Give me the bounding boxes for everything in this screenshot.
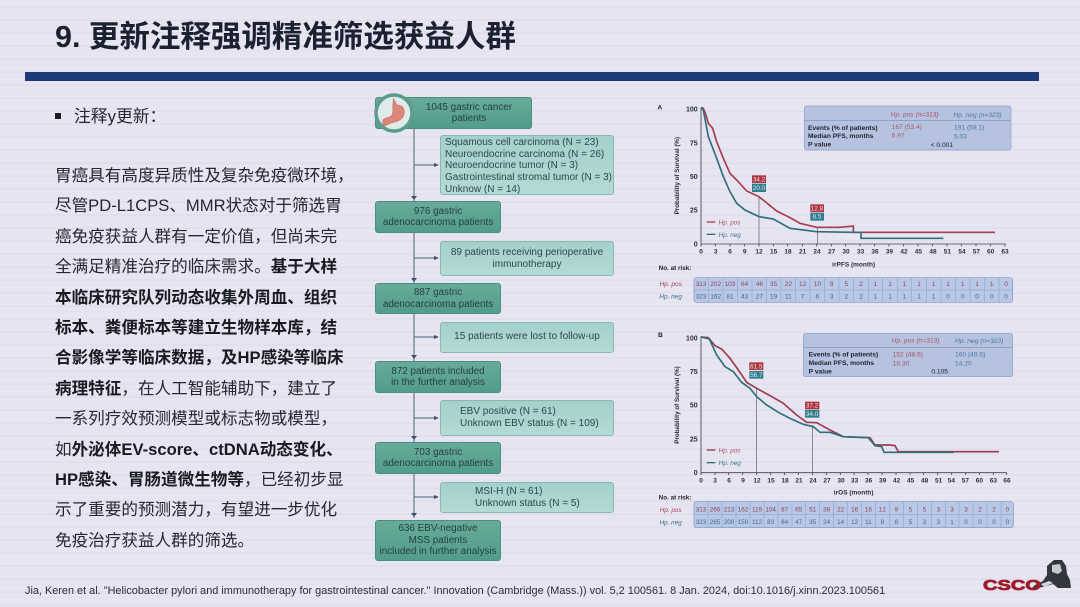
risk table: 19 [770, 294, 778, 301]
x axis and labels: 48 [929, 249, 937, 256]
x axis and labels: 39 [886, 249, 893, 256]
x axis and labels: 42 [900, 249, 908, 256]
x axis and labels: 60 [976, 477, 983, 484]
x axis and labels: 45 [915, 249, 922, 256]
risk table: 7 [801, 294, 805, 301]
risk table: 1 [903, 281, 907, 288]
risk table: 27 [756, 294, 763, 301]
risk table: 1 [961, 281, 965, 288]
stats table [804, 106, 1011, 150]
x axis and labels: 9 [741, 477, 745, 484]
risk table: 3 [937, 507, 941, 514]
x axis and labels: 63 [990, 477, 997, 484]
risk table: 202 [710, 281, 721, 288]
value tags: 34.2 [753, 176, 766, 183]
risk table: 83 [767, 519, 775, 526]
value tags: 12.8 [811, 205, 824, 212]
risk table: 16 [865, 507, 872, 514]
risk table: 6 [816, 294, 820, 301]
body text block: 免疫治疗获益人群的筛选。 [55, 531, 254, 550]
risk table: 2 [845, 294, 849, 301]
y axis and labels: 50 [690, 174, 698, 181]
risk table: 0 [946, 294, 950, 301]
y axis and labels: 0 [694, 470, 698, 477]
body text block: 如外泌体EV-score、ctDNA动态变化、 [55, 440, 343, 459]
risk table: 1 [888, 281, 892, 288]
risk table: 10 [814, 281, 821, 288]
no. at risk heading: No. at risk: [659, 265, 691, 272]
stats table: Hp. neg (n=323) [953, 112, 1002, 119]
exclusion box: histology: Unknow (N = 14) [445, 184, 520, 195]
risk table: 0 [961, 294, 965, 301]
risk table: 12 [851, 519, 859, 526]
y axis and labels [674, 335, 698, 477]
x axis and labels: 6 [727, 477, 731, 484]
flow box: 887 patients [375, 283, 501, 314]
x axis and labels: 39 [879, 477, 887, 484]
x axis and labels: 57 [973, 249, 980, 256]
flow box: 703 patients: 703 gastric [414, 446, 462, 458]
risk table: 266 [710, 507, 721, 514]
risk table: 46 [756, 281, 763, 288]
x axis and labels: 63 [1001, 249, 1009, 256]
risk table: Hp. neg [660, 519, 682, 526]
y axis and labels: 50 [690, 403, 698, 410]
body text block: 胃癌具有高度异质性及复杂免疫微环境， [55, 166, 354, 185]
body text block [55, 166, 354, 550]
body text block: 本临床研究队列动态收集外周血、组织 [55, 288, 337, 307]
value tags: 8.5 [813, 214, 822, 221]
header rule [25, 72, 1039, 81]
flow box: 703 patients: adenocarcinoma patients [383, 458, 493, 469]
risk table [660, 502, 1013, 528]
no. at risk heading: No. at risk: [659, 495, 691, 502]
risk table: Hp. pos [660, 507, 682, 514]
x axis and labels: 42 [893, 477, 901, 484]
flow box: 872 patients: 872 patients included [391, 366, 485, 376]
risk table: 8 [881, 519, 885, 526]
value tags [749, 362, 819, 418]
citation: Jia, Keren et al. "Helicobacter pylori and immunotherapy for gastrointestinal cancer." Innovation (Cambridge (Mass.)) vol. 5,2 100561. 8 Jan. 2024, doi:10.1016/j.xinn.2023.100561 [25, 585, 885, 597]
x axis and labels: 15 [767, 477, 775, 484]
x axis and labels: 18 [784, 249, 792, 256]
exclusion box: perioperative [440, 241, 614, 276]
exclusion box: perioperative: immunotherapy [493, 259, 561, 270]
risk table: 1 [917, 281, 921, 288]
legend: Hp. neg [719, 460, 741, 467]
risk table: 43 [741, 294, 749, 301]
flow box: 636 patients: MSS patients [409, 535, 467, 546]
stats table: Median PFS, months [808, 133, 874, 140]
x axis and labels: 0 [699, 249, 703, 256]
x axis and labels: 24 [813, 249, 821, 256]
risk table: 0 [975, 294, 979, 301]
risk table: 0 [978, 519, 982, 526]
exclusion box: MSI-H [440, 482, 614, 513]
risk table: 9 [830, 281, 834, 288]
y axis and labels: 25 [690, 208, 698, 215]
risk table: 11 [785, 294, 792, 301]
x axis and labels: 0 [699, 477, 703, 484]
legend: Hp. neg [719, 232, 741, 239]
flow box: 887 patients: 887 gastric [414, 287, 462, 298]
risk table: 1 [950, 519, 954, 526]
x axis and labels: 21 [799, 249, 807, 256]
flow box: 872 patients: in the further analysis [391, 377, 485, 388]
x axis and labels: 21 [795, 477, 803, 484]
x axis and labels: 12 [753, 477, 761, 484]
risk table: 1 [990, 281, 994, 288]
risk table: 87 [781, 507, 789, 514]
stats table: 167 (53.4) [892, 124, 922, 131]
risk table: 0 [964, 519, 968, 526]
x axis and labels: 54 [958, 249, 966, 256]
x axis and labels: 36 [865, 477, 873, 484]
stats table: Median PFS, months [809, 360, 874, 367]
x axis and labels: 30 [837, 477, 845, 484]
risk table: 16 [851, 507, 859, 514]
body text block: 癌免疫获益人群有一定价值，但尚未完 [55, 227, 337, 246]
stats table: < 0.001 [931, 142, 953, 149]
stats table: 6.97 [892, 133, 905, 140]
exclusion box: MSI-H: MSI-H (N = 61) [475, 486, 543, 497]
exclusion box: MSI-H: Unknown status (N = 5) [475, 498, 580, 509]
risk table: 1 [903, 294, 907, 301]
risk table: 5 [909, 507, 913, 514]
risk table: 12 [799, 281, 807, 288]
flow box: 703 patients [375, 442, 501, 474]
x axis and labels: 48 [921, 477, 929, 484]
risk table: 1 [975, 281, 979, 288]
risk table: 0 [1004, 281, 1008, 288]
logo: CSCO lion [983, 560, 1071, 594]
stats table: 152 (48.6) [893, 351, 923, 358]
y axis and labels: Probability of Survival (%) [674, 137, 681, 214]
x axis and labels: 57 [962, 477, 969, 484]
stats table: 14.20 [955, 360, 972, 367]
risk table: 2 [859, 281, 863, 288]
value tags: 34.0 [806, 411, 819, 418]
legend [707, 448, 741, 467]
x axis and labels: 12 [755, 249, 763, 256]
body text block: 标本、粪便标本等建立生物样本库，结 [55, 318, 337, 337]
x axis and labels: 27 [828, 249, 836, 256]
risk table: 5 [845, 281, 849, 288]
flow box: 636 patients: 636 EBV-negative [398, 523, 478, 534]
risk table: 38 [823, 507, 831, 514]
stats table: P value [809, 369, 832, 376]
risk table: 1 [874, 294, 878, 301]
exclusion box: histology [440, 135, 614, 195]
exclusion box: lost to follow-up: 15 patients were lost to follow-up [454, 331, 600, 342]
stats table [803, 333, 1013, 377]
flow box: 976 patients: adenocarcinoma patients [383, 217, 493, 228]
risk table: 3 [964, 507, 968, 514]
x axis and labels: 30 [842, 249, 850, 256]
exclusion box: histology: Gastrointestinal stromal tumor (N = 3) [445, 172, 612, 183]
x axis and labels: 3 [714, 249, 718, 256]
chart B: irOS survival curves [658, 332, 1014, 528]
value tags [752, 175, 824, 221]
risk table: 162 [738, 507, 749, 514]
flow box: 636 patients: included in further analysis [380, 546, 496, 557]
x axis and labels: 27 [823, 477, 831, 484]
risk table: 24 [823, 519, 831, 526]
risk table: 3 [950, 507, 954, 514]
y axis and labels: 75 [690, 140, 698, 147]
stats table: Hp. neg (n=323) [955, 338, 1003, 345]
flow box: 976 patients [375, 201, 501, 233]
y axis and labels: 25 [690, 436, 698, 443]
y axis and labels: Probability of Survival (%) [674, 366, 681, 444]
x axis and labels: 24 [809, 477, 817, 484]
flowchart connectors [411, 129, 439, 518]
value tags: 61.5 [750, 363, 763, 370]
stats table: 18.30 [893, 360, 910, 367]
risk table: 313 [696, 281, 707, 288]
risk table: 47 [795, 519, 803, 526]
exclusion box: histology: Squamous cell carcinoma (N = 23) [445, 137, 599, 148]
y axis and labels: 0 [694, 241, 698, 248]
curve Hp neg [701, 337, 953, 452]
flow box: 1045 patients [375, 97, 532, 129]
risk table: 0 [990, 294, 994, 301]
stats table: 5.03 [954, 134, 967, 141]
risk table: 0 [1006, 507, 1010, 514]
stats table: P value [808, 142, 831, 149]
x axis and labels: 33 [851, 477, 859, 484]
x axis and labels: 45 [907, 477, 915, 484]
y axis and labels: 100 [686, 335, 698, 342]
flow box: 1045 patients: 1045 gastric cancer [426, 102, 512, 112]
x axis and labels: 15 [770, 249, 778, 256]
risk table: 0 [1006, 519, 1010, 526]
flow box: 976 patients: 976 gastric [414, 206, 462, 216]
exclusion box: EBV: EBV positive (N = 61) [460, 406, 556, 417]
body text block: 一系列疗效预测模型或标志物或模型， [55, 409, 337, 428]
risk table: 8 [895, 519, 899, 526]
x axis and labels: 9 [743, 249, 747, 256]
risk table: 64 [781, 519, 789, 526]
stats table: 160 (49.5) [955, 351, 985, 358]
risk table: 323 [696, 519, 707, 526]
risk table: 22 [785, 281, 792, 288]
exclusion box: perioperative: 89 patients receiving perioperative [451, 247, 603, 258]
stats table: Events (% of patients) [808, 125, 878, 132]
risk table: 265 [710, 519, 721, 526]
x axis and labels: 54 [948, 477, 955, 484]
x axis and labels: 60 [987, 249, 995, 256]
x axis and labels [699, 336, 1011, 497]
risk table: 313 [696, 507, 707, 514]
legend [707, 219, 741, 239]
x axis and labels: irOS (month) [834, 490, 874, 497]
stats table: 0.105 [931, 369, 948, 376]
body text block: 示了重要的预测潜力，有望进一步优化 [55, 500, 337, 519]
risk table: 104 [765, 507, 776, 514]
risk table: 14 [837, 519, 845, 526]
risk table: 103 [725, 281, 736, 288]
curve Hp neg [701, 108, 943, 238]
legend: Hp. pos [719, 219, 741, 226]
risk table: 0 [1004, 294, 1008, 301]
risk table: 2 [992, 507, 996, 514]
stats table: Events (% of patients) [809, 352, 878, 359]
y axis and labels: 100 [686, 107, 698, 114]
body text block: HP感染、胃肠道微生物等，已经初步显 [55, 470, 344, 489]
flow box: 872 patients [375, 361, 501, 393]
risk table: 2 [978, 507, 982, 514]
exclusion box: histology: Neuroendocrine tumor (N = 3) [445, 160, 578, 171]
panel letter A: A [657, 105, 662, 112]
risk table: 1 [932, 281, 936, 288]
risk table: 1 [946, 281, 950, 288]
value tags: 37.2 [806, 403, 819, 410]
body text block: 病理特征，在人工智能辅助下，建立了 [55, 379, 337, 398]
title: 9. 更新注释强调精准筛选获益人群 [55, 20, 516, 54]
risk table: 11 [865, 519, 872, 526]
risk table: 51 [809, 507, 817, 514]
risk table: 5 [909, 519, 913, 526]
x axis and labels: 18 [781, 477, 789, 484]
risk table: 200 [724, 519, 735, 526]
x axis and labels: 51 [935, 477, 943, 484]
risk table: 3 [937, 519, 941, 526]
body text block: 全满足精准治疗的临床需求。基于大样 [55, 257, 337, 276]
flow box: 1045 patients: patients [452, 113, 486, 124]
y axis and labels [674, 107, 698, 248]
x axis and labels: 6 [728, 249, 732, 256]
stats table: Hp. pos (n=313) [891, 112, 939, 119]
bullet heading: 注释y更新： [74, 107, 166, 126]
risk table: 35 [809, 519, 817, 526]
risk table: 81 [726, 294, 734, 301]
risk table: 64 [741, 281, 749, 288]
x axis and labels: 3 [713, 477, 717, 484]
body text block: 尽管PD-L1CPS、MMR状态对于筛选胃 [55, 196, 342, 215]
risk table: 1 [932, 294, 936, 301]
risk table: 22 [837, 507, 845, 514]
stats table: Hp. pos (n=313) [892, 338, 940, 345]
stats table: 191 (59.1) [954, 124, 984, 131]
risk table: 162 [710, 294, 721, 301]
y axis and labels: 75 [690, 369, 698, 376]
legend: Hp. pos [719, 448, 741, 455]
risk table: 1 [874, 281, 878, 288]
marker lines [759, 197, 817, 244]
exclusion box: EBV [440, 400, 614, 436]
risk table: 5 [923, 507, 927, 514]
flow box: 887 patients: adenocarcinoma patients [383, 298, 493, 310]
x axis and labels: 36 [871, 249, 879, 256]
risk table: 3 [923, 519, 927, 526]
x axis and labels: irPFS (month) [832, 261, 875, 268]
exclusion box: EBV: Unknown EBV status (N = 109) [460, 418, 599, 429]
risk table: 1 [917, 294, 921, 301]
marker lines [757, 388, 812, 473]
flow box: 636 patients [375, 520, 501, 561]
chart A: irPFS survival curves [657, 105, 1013, 303]
risk table: 1 [888, 294, 892, 301]
risk table: 0 [992, 519, 996, 526]
risk table: 12 [879, 507, 886, 514]
x axis and labels: 51 [944, 249, 951, 256]
risk table: 213 [724, 507, 735, 514]
panel letter B: B [658, 332, 663, 339]
risk table: 119 [752, 507, 763, 514]
risk table [659, 278, 1013, 302]
curve Hp pos [701, 337, 999, 452]
curve Hp pos [701, 108, 995, 232]
risk table: 9 [895, 507, 899, 514]
value tags: 56.7 [750, 372, 763, 379]
exclusion box: lost to follow-up [440, 322, 614, 353]
risk table: 35 [770, 281, 778, 288]
x axis and labels: 66 [1003, 477, 1011, 484]
x axis and labels [699, 108, 1009, 268]
icon: stomach [374, 93, 414, 133]
exclusion box: histology: Neuroendocrine carcinoma (N = 26) [445, 149, 604, 160]
body text block: 合影像学等临床数据，及HP感染等临床 [55, 348, 344, 367]
risk table: 2 [859, 294, 863, 301]
risk table: 3 [830, 294, 834, 301]
risk table: 150 [738, 519, 749, 526]
risk table: 323 [696, 294, 707, 301]
logo: CSCO lion: CSCO [983, 577, 1041, 594]
value tags: 20.0 [753, 185, 766, 192]
risk table: 65 [795, 507, 803, 514]
risk table: 112 [752, 519, 763, 526]
x axis and labels: 33 [857, 249, 865, 256]
risk table: Hp. pos [659, 281, 683, 288]
risk table: Hp. neg [659, 294, 682, 301]
